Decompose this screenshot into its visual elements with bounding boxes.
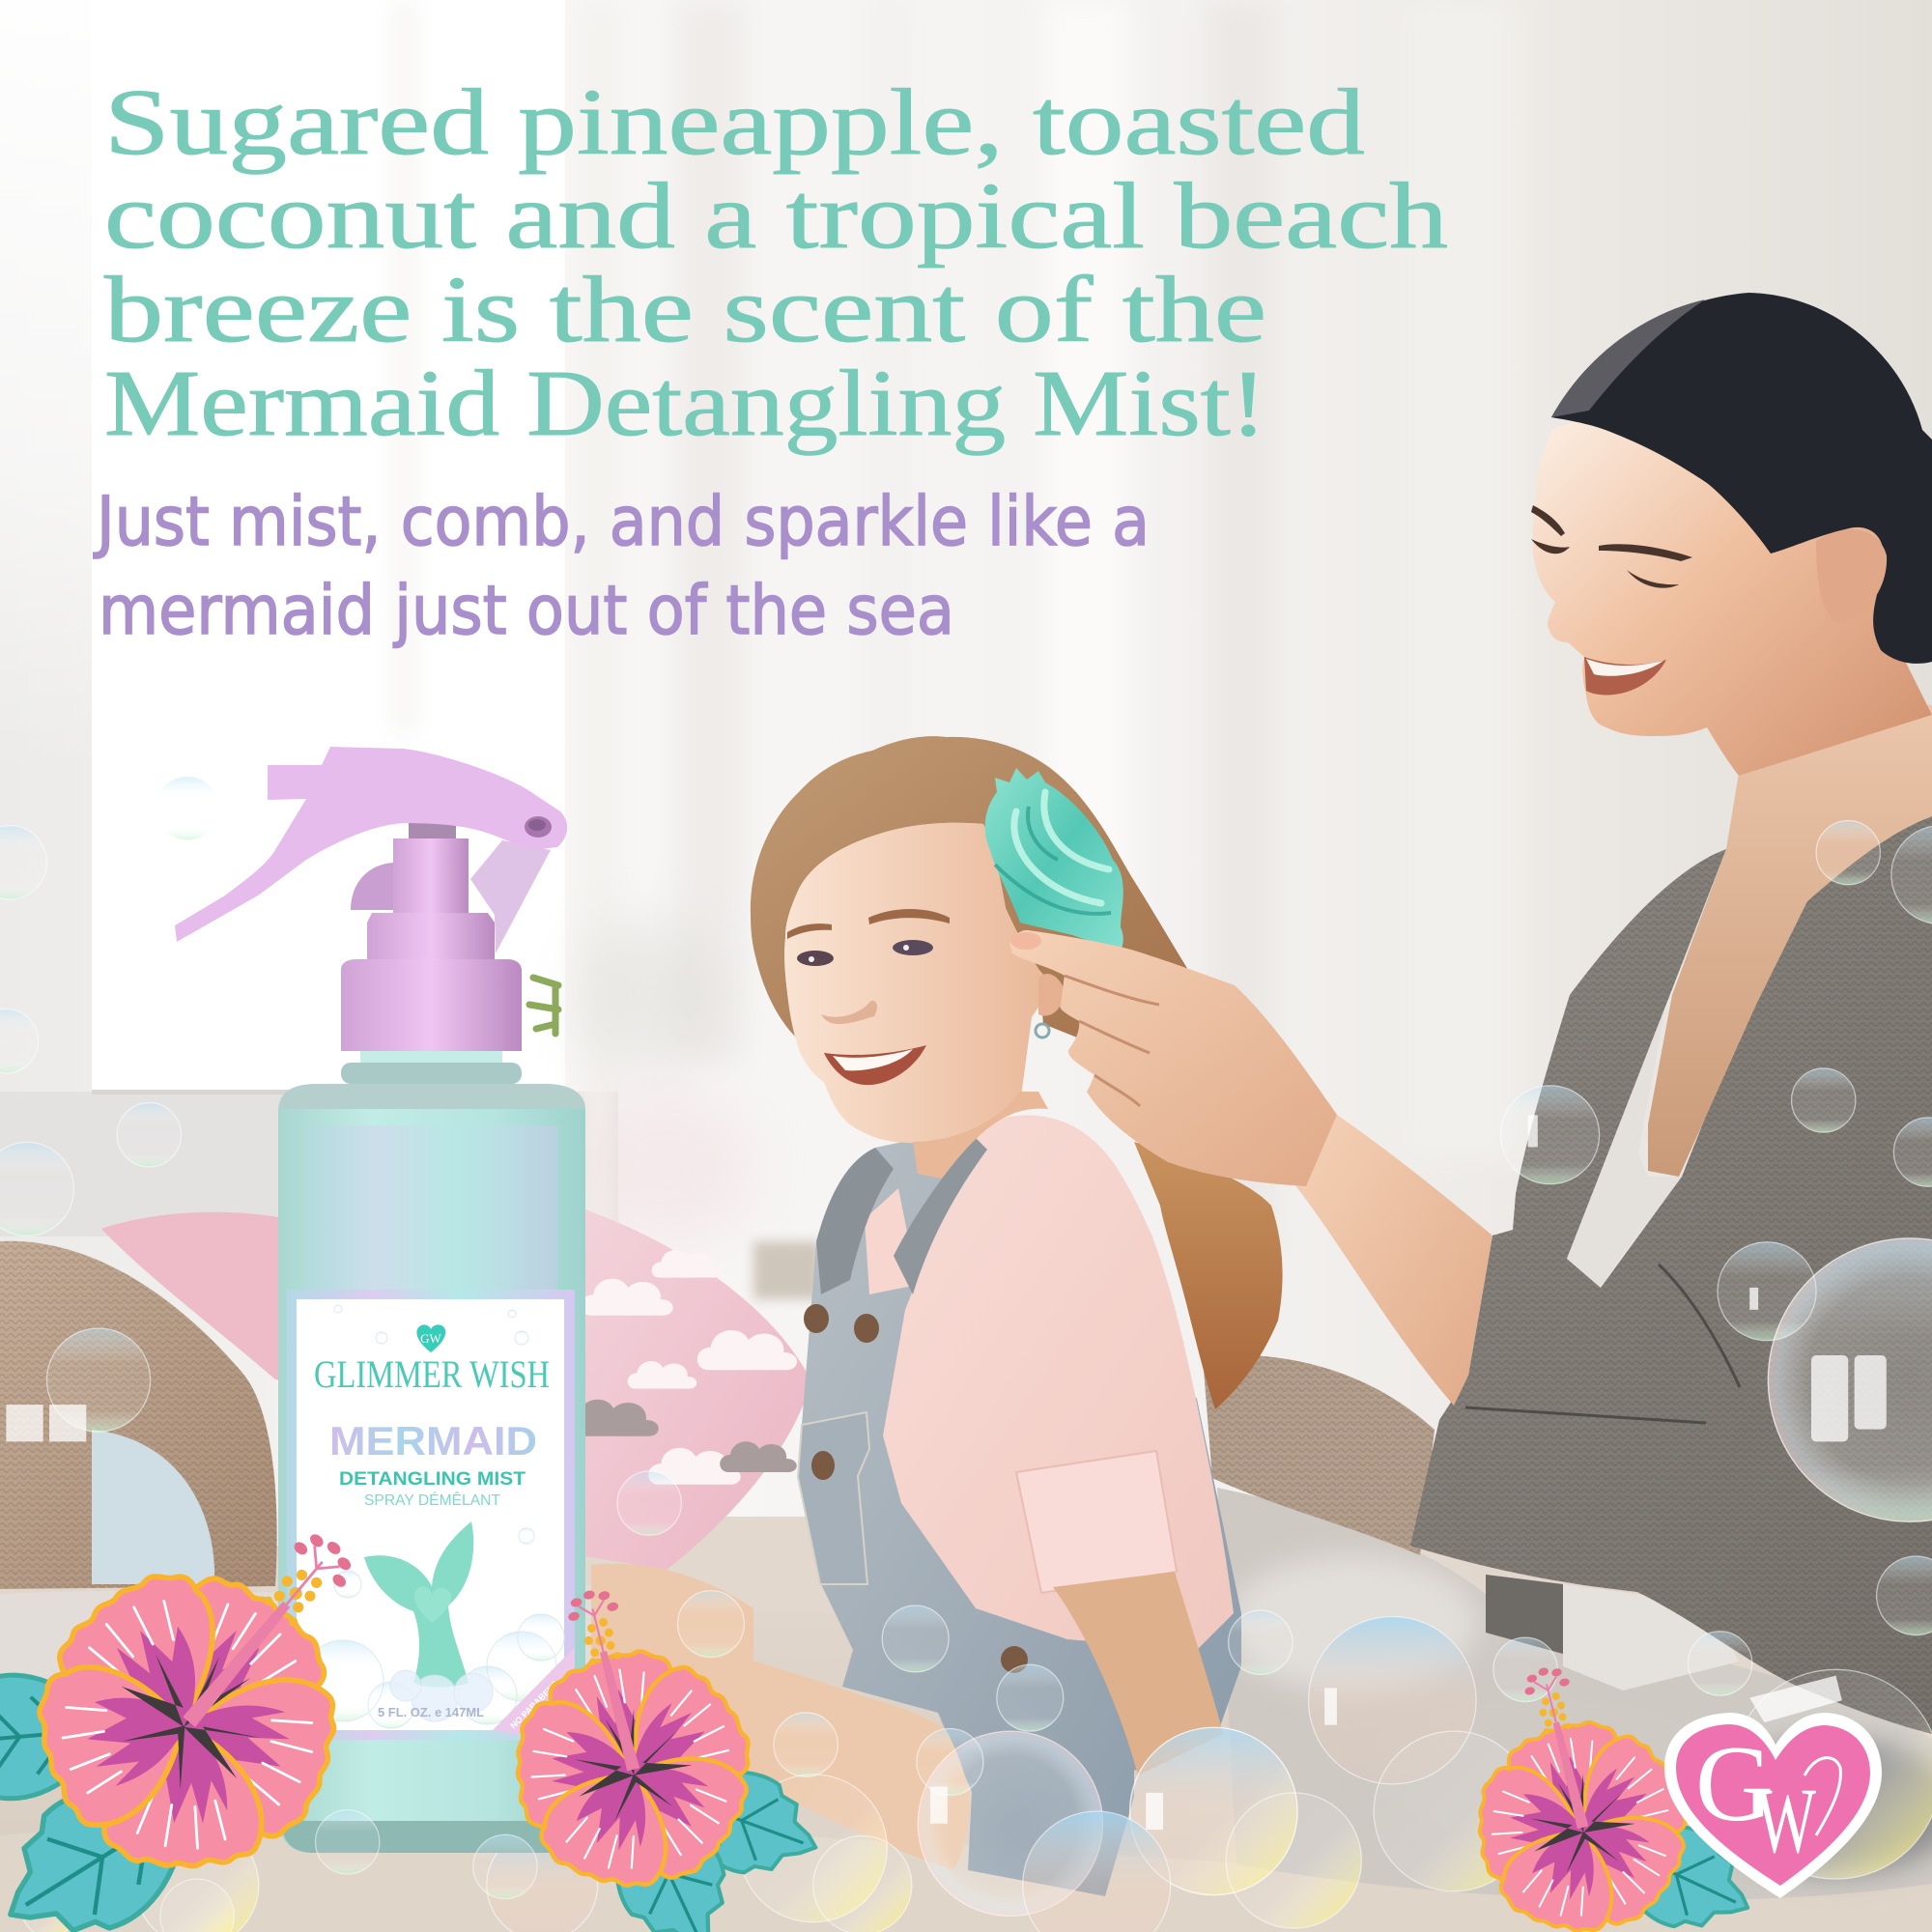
label brand: GLIMMER WISH [314, 1352, 550, 1396]
label bubbles [295, 1305, 564, 1729]
girl overall strap [816, 1148, 894, 1294]
light blue cushion [92, 1430, 214, 1584]
woman neck and chest [1648, 696, 1932, 1177]
holographic band [304, 1125, 557, 1290]
girl ear and earring [1036, 974, 1065, 1037]
woman smile [1584, 657, 1666, 696]
product: spray bottle [175, 747, 585, 1853]
headline text [104, 71, 1448, 456]
label volume: 5 FL. OZ. e 147ML [378, 1705, 484, 1719]
label foam bubbles [390, 1670, 493, 1721]
girl back hair [1134, 1142, 1283, 1409]
subheading text [93, 482, 1150, 650]
headline text: Sugared pineapple, toasted [104, 71, 1365, 175]
woman hair [1551, 293, 1932, 664]
girl face [785, 823, 1053, 1144]
girl smile [824, 1045, 926, 1085]
cardigan body [1410, 816, 1932, 1734]
girl pink shirt [883, 1115, 1234, 1650]
bottle side hook [351, 863, 393, 910]
girl nose shadow [821, 1001, 877, 1024]
pink pillow left [101, 1212, 290, 1381]
label subtitle: DETANGLING MIST [339, 1469, 526, 1490]
woman white top lower [1563, 1584, 1739, 1690]
brush held in hair [985, 768, 1123, 952]
label mermaid tail [364, 1521, 473, 1687]
woman eyes and brows [1531, 505, 1692, 588]
cardigan sleeve fold [1465, 1264, 1740, 1423]
bottle base glass [282, 1821, 583, 1853]
bottle shoulder highlight [278, 1084, 585, 1109]
woman forearm [1294, 1115, 1492, 1406]
label no parabens badge [493, 1647, 575, 1734]
girl [591, 736, 1283, 1896]
girl bib pocket [798, 1412, 869, 1584]
label no parabens badge: NO PARABENS [508, 1679, 560, 1730]
bottle bubbles [22, 1810, 537, 1932]
woman white top [1567, 1007, 1682, 1288]
girl overalls [798, 1126, 1241, 1896]
logo letters [1695, 1724, 1840, 1872]
bottle body [278, 1084, 585, 1853]
knit cushion left [0, 1241, 277, 1589]
girl neckline pink [865, 1188, 918, 1294]
overall buttons [804, 1304, 1028, 1673]
knit cushion right [1203, 1355, 1435, 1555]
mother's hand [1009, 930, 1337, 1186]
bottle trigger arm [470, 840, 551, 953]
label product name: MERMAID [329, 1418, 537, 1463]
hibiscus left with leaves [0, 1439, 462, 1932]
label french subtitle: SPRAY DÉMÊLANT [364, 1491, 500, 1509]
bottle collar [367, 913, 495, 961]
woman hairline highlight [1551, 299, 1705, 417]
subheading text: mermaid just out of the sea [99, 571, 954, 650]
girl hair [751, 736, 1190, 1063]
logo letters: G [1695, 1724, 1774, 1844]
woman ear [1816, 529, 1887, 623]
bottle pivot [525, 816, 552, 838]
bottle stem [393, 838, 469, 914]
bottle neck [360, 1051, 502, 1065]
bottle shoulder ring [341, 1063, 522, 1084]
woman cardigan and body [1410, 696, 1932, 1734]
headline text: coconut and a tropical beach [104, 164, 1448, 269]
logo letters: W [1756, 1769, 1816, 1872]
logo badge [1664, 1713, 1882, 1898]
bottle trigger head [175, 747, 567, 942]
girl rolled cuff [1016, 1451, 1177, 1593]
label heart logo [416, 1324, 445, 1352]
bottle cap [341, 959, 522, 1051]
window with curtains [0, 0, 1517, 1299]
headline text: breeze is the scent of the [104, 258, 1266, 362]
label [287, 1290, 575, 1740]
pink cloud pillow [566, 1208, 811, 1570]
girl second strap [894, 1138, 987, 1294]
soap bubbles behind product [0, 777, 1932, 1932]
hibiscus right with leaves [1431, 1640, 1769, 1932]
woman face [1533, 396, 1932, 776]
girl neck [913, 1092, 1048, 1179]
hibiscus centre with leaves [463, 1559, 833, 1932]
bottle nozzle stem [409, 821, 456, 840]
woman [1294, 293, 1932, 1734]
bed and blanket [0, 1488, 1932, 1932]
cardigan back under sleeve [1486, 1575, 1563, 1654]
headline text: Mermaid Detangling Mist! [104, 352, 1266, 456]
girl arm [1053, 1572, 1223, 1776]
girl leg [591, 1564, 970, 1870]
label heart logo: GW [420, 1331, 442, 1346]
subheading text: Just mist, comb, and sparkle like a [93, 482, 1150, 561]
girl eyes and brows [787, 909, 950, 966]
